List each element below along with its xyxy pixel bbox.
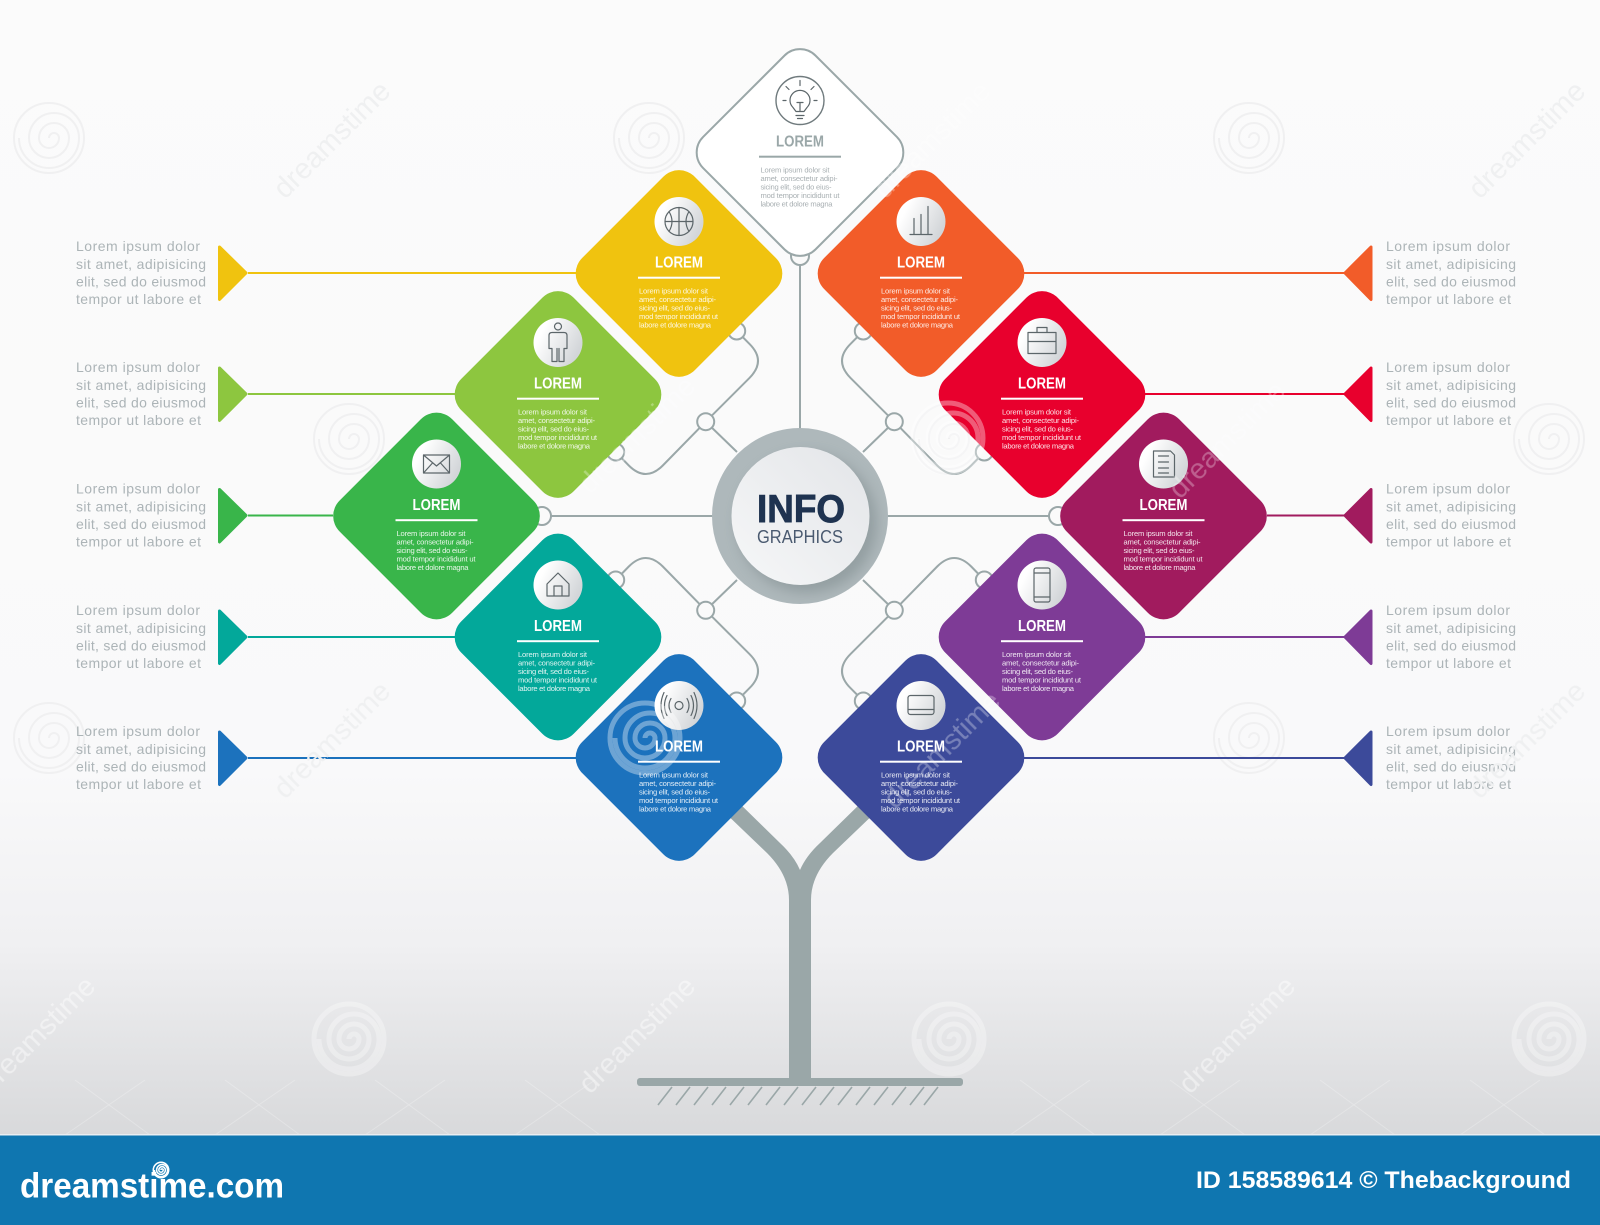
body text xyxy=(1002,650,1082,693)
panel: teal xyxy=(446,525,670,749)
side text: sit amet, adipisicing xyxy=(76,377,206,393)
side text: tempor ut labore et xyxy=(76,655,201,671)
icon: house xyxy=(534,560,582,610)
body text: labore et dolore magna xyxy=(639,804,712,814)
side text xyxy=(1386,238,1516,307)
body text: Lorem ipsum dolor sit xyxy=(1002,650,1072,659)
body text: Lorem ipsum dolor sit xyxy=(396,529,466,538)
side text: elit, sed do eiusmod xyxy=(1386,638,1516,654)
ground hatching xyxy=(658,1087,938,1105)
icon: card xyxy=(896,681,946,730)
body text: labore et dolore magna xyxy=(518,442,591,450)
body text: labore et dolore magna xyxy=(881,804,954,814)
side text: Lorem ipsum dolor xyxy=(76,238,200,254)
side text: sit amet, adipisicing xyxy=(1386,256,1516,272)
icon: light bulb xyxy=(776,76,824,124)
heading: LOREM xyxy=(1018,618,1066,635)
side text: Lorem ipsum dolor xyxy=(1386,480,1510,496)
heading: LOREM xyxy=(534,375,582,392)
side text: tempor ut labore et xyxy=(76,534,201,550)
panel: purple xyxy=(930,525,1154,749)
body text: mod tempor incididunt ut xyxy=(881,312,961,321)
heading: LOREM xyxy=(412,497,460,514)
body text: sicing elit, sed do eius- xyxy=(1124,546,1195,555)
side text: Lorem ipsum dolor xyxy=(76,723,200,739)
body text: amet, consectetur adipi- xyxy=(881,779,958,788)
left row: teal xyxy=(76,602,455,671)
body text: sicing elit, sed do eius- xyxy=(639,788,710,796)
side text: elit, sed do eiusmod xyxy=(76,638,206,654)
panel: red xyxy=(930,282,1154,507)
body text: mod tempor incididunt ut xyxy=(881,796,961,805)
panel: green xyxy=(324,404,549,628)
heading: LOREM xyxy=(534,618,582,635)
body text xyxy=(881,770,961,814)
text: dreamstime xyxy=(572,970,702,1100)
body text: mod tempor incididunt ut xyxy=(639,796,719,805)
body text: sicing elit, sed do eius- xyxy=(518,667,589,676)
body text: mod tempor incididunt ut xyxy=(1002,676,1082,684)
side text: elit, sed do eiusmod xyxy=(1386,516,1516,532)
body text: mod tempor incididunt ut xyxy=(639,312,719,321)
body text: labore et dolore magna xyxy=(518,684,591,693)
side text: tempor ut labore et xyxy=(1386,291,1511,307)
body text: labore et dolore magna xyxy=(1002,684,1075,693)
body text xyxy=(881,286,961,330)
body text: labore et dolore magna xyxy=(881,320,954,330)
icon: envelope xyxy=(412,440,461,488)
side text xyxy=(76,238,206,307)
body text: Lorem ipsum dolor sit xyxy=(1124,529,1193,538)
panel: orange xyxy=(809,161,1033,386)
left row: green xyxy=(76,480,333,550)
body text: mod tempor incididunt ut xyxy=(760,191,840,200)
right row: indigo xyxy=(1024,723,1516,792)
body text: labore et dolore magna xyxy=(760,200,833,208)
side text: sit amet, adipisicing xyxy=(76,741,206,757)
body text: Lorem ipsum dolor sit xyxy=(518,650,588,659)
footer bar xyxy=(0,1134,1600,1225)
heading: LOREM xyxy=(1140,497,1188,514)
body text: sicing elit, sed do eius- xyxy=(881,304,952,312)
side text: elit, sed do eiusmod xyxy=(76,394,206,410)
ground bar xyxy=(637,1078,963,1086)
side text: tempor ut labore et xyxy=(1386,534,1511,550)
side text: sit amet, adipisicing xyxy=(1386,741,1516,757)
body text: sicing elit, sed do eius- xyxy=(518,424,589,434)
body text: mod tempor incididunt ut xyxy=(1002,433,1082,442)
text: dreamstime xyxy=(267,75,397,205)
left row: blue xyxy=(76,723,576,792)
panel: lime green xyxy=(446,282,670,507)
icon: smartphone xyxy=(1018,560,1066,610)
body text: mod tempor incididunt ut xyxy=(518,676,598,684)
body text: Lorem ipsum dolor sit xyxy=(760,166,830,174)
body text: labore et dolore magna xyxy=(1002,442,1075,450)
side text: sit amet, adipisicing xyxy=(76,620,206,636)
tree trunk and branches xyxy=(637,798,963,1105)
body text: mod tempor incididunt ut xyxy=(518,433,598,442)
body text: labore et dolore magna xyxy=(639,320,712,330)
body text: amet, consectetur adipi- xyxy=(1124,538,1201,546)
right row: orange xyxy=(1024,238,1516,307)
side text xyxy=(1386,723,1516,792)
side text: elit, sed do eiusmod xyxy=(76,274,206,290)
side text: tempor ut labore et xyxy=(1386,412,1511,428)
body text: sicing elit, sed do eius- xyxy=(639,304,710,312)
icon: briefcase xyxy=(1018,318,1066,367)
icon: bar chart xyxy=(896,197,946,246)
heading: LOREM xyxy=(897,254,945,271)
side text: Lorem ipsum dolor xyxy=(1386,602,1510,618)
body text: sicing elit, sed do eius- xyxy=(760,182,832,192)
icon: person xyxy=(534,318,582,367)
left row: lime xyxy=(76,359,455,428)
side text: sit amet, adipisicing xyxy=(1386,620,1516,636)
footer logo mark xyxy=(153,1162,169,1178)
body text: Lorem ipsum dolor sit xyxy=(881,770,951,780)
side text: elit, sed do eiusmod xyxy=(1386,274,1516,290)
side text: sit amet, adipisicing xyxy=(1386,377,1516,393)
side text: elit, sed do eiusmod xyxy=(76,758,206,774)
right row: red xyxy=(1145,359,1516,428)
hub title: INFO xyxy=(757,488,845,531)
panel: top white lorem xyxy=(688,40,912,265)
body text: Lorem ipsum dolor sit xyxy=(639,286,709,296)
heading: LOREM xyxy=(776,133,824,150)
side text: sit amet, adipisicing xyxy=(1386,498,1516,514)
side text xyxy=(76,480,206,550)
side text: tempor ut labore et xyxy=(76,776,201,792)
text: dreamstime xyxy=(867,75,997,205)
heading: LOREM xyxy=(655,254,703,271)
body text xyxy=(639,286,719,330)
connector network xyxy=(533,247,1067,710)
body text: Lorem ipsum dolor sit xyxy=(1002,408,1072,416)
panel: indigo xyxy=(809,645,1033,870)
heading: LOREM xyxy=(897,738,945,755)
body text xyxy=(518,650,598,693)
text: dreamstime xyxy=(1462,75,1592,205)
right row: purple xyxy=(1145,602,1516,671)
side text xyxy=(1386,602,1516,671)
body text xyxy=(396,529,476,572)
center hub xyxy=(712,428,888,604)
side text: elit, sed do eiusmod xyxy=(1386,758,1516,774)
side text: Lorem ipsum dolor xyxy=(1386,238,1510,254)
right row: plum xyxy=(1267,480,1516,550)
side text: Lorem ipsum dolor xyxy=(76,359,200,375)
side text: Lorem ipsum dolor xyxy=(76,602,200,618)
hub subtitle: GRAPHICS xyxy=(757,526,843,547)
body text: mod tempor incididunt ut xyxy=(1124,554,1203,564)
text: dreamstime xyxy=(877,685,1007,815)
body text xyxy=(518,408,598,450)
body text: amet, consectetur adipi- xyxy=(396,538,474,546)
body text: Lorem ipsum dolor sit xyxy=(881,286,951,296)
body text: amet, consectetur adipi- xyxy=(760,174,838,183)
body text: labore et dolore magna xyxy=(396,563,469,572)
body text xyxy=(1124,529,1203,572)
side text: tempor ut labore et xyxy=(1386,776,1511,792)
panel: plum xyxy=(1051,404,1276,628)
body text: amet, consectetur adipi- xyxy=(1002,658,1079,668)
side text xyxy=(1386,480,1516,550)
body text: amet, consectetur adipi- xyxy=(639,779,716,788)
side text xyxy=(76,359,206,428)
side text: tempor ut labore et xyxy=(1386,655,1511,671)
heading: LOREM xyxy=(655,738,703,755)
icon: basketball xyxy=(654,197,704,246)
body text: amet, consectetur adipi- xyxy=(1002,416,1079,425)
body text: sicing elit, sed do eius- xyxy=(396,546,468,555)
side text: sit amet, adipisicing xyxy=(76,256,206,272)
body text: sicing elit, sed do eius- xyxy=(881,788,952,796)
body text: mod tempor incididunt ut xyxy=(396,554,476,564)
side text: Lorem ipsum dolor xyxy=(1386,723,1510,739)
body text: Lorem ipsum dolor sit xyxy=(639,770,709,780)
text: dreamstime xyxy=(1162,375,1292,505)
text: dreamstime xyxy=(267,675,397,805)
image id credit: ID 158589614 © Thebackground xyxy=(1196,1167,1571,1194)
panel: blue xyxy=(567,645,791,870)
body text: amet, consectetur adipi- xyxy=(518,416,595,425)
text: dreamstime xyxy=(1172,970,1302,1100)
side text: Lorem ipsum dolor xyxy=(76,480,200,496)
side text xyxy=(76,723,206,792)
body text xyxy=(639,770,719,814)
left row: yellow xyxy=(76,238,576,307)
body text: amet, consectetur adipi- xyxy=(639,295,716,304)
body text: amet, consectetur adipi- xyxy=(518,658,595,668)
heading: LOREM xyxy=(1018,375,1066,392)
body text xyxy=(1002,408,1082,450)
body text: sicing elit, sed do eius- xyxy=(1002,424,1073,434)
side text: Lorem ipsum dolor xyxy=(1386,359,1510,375)
body text: labore et dolore magna xyxy=(1124,563,1196,572)
side text: elit, sed do eiusmod xyxy=(76,516,206,532)
side text: elit, sed do eiusmod xyxy=(1386,394,1516,410)
body text: Lorem ipsum dolor sit xyxy=(518,408,588,416)
icon: signal waves xyxy=(654,681,704,730)
icon: document xyxy=(1139,440,1188,488)
panel: yellow xyxy=(567,161,791,386)
text: dreamstime xyxy=(572,370,702,500)
body text: sicing elit, sed do eius- xyxy=(1002,667,1073,676)
body text: amet, consectetur adipi- xyxy=(881,295,958,304)
side text xyxy=(1386,359,1516,428)
text: dreamstime xyxy=(1462,675,1592,805)
side text: sit amet, adipisicing xyxy=(76,498,206,514)
side text: tempor ut labore et xyxy=(76,412,201,428)
body text xyxy=(760,166,840,208)
side text xyxy=(76,602,206,671)
side text: tempor ut labore et xyxy=(76,291,201,307)
footer logo: dreamstime.com xyxy=(20,1166,284,1206)
